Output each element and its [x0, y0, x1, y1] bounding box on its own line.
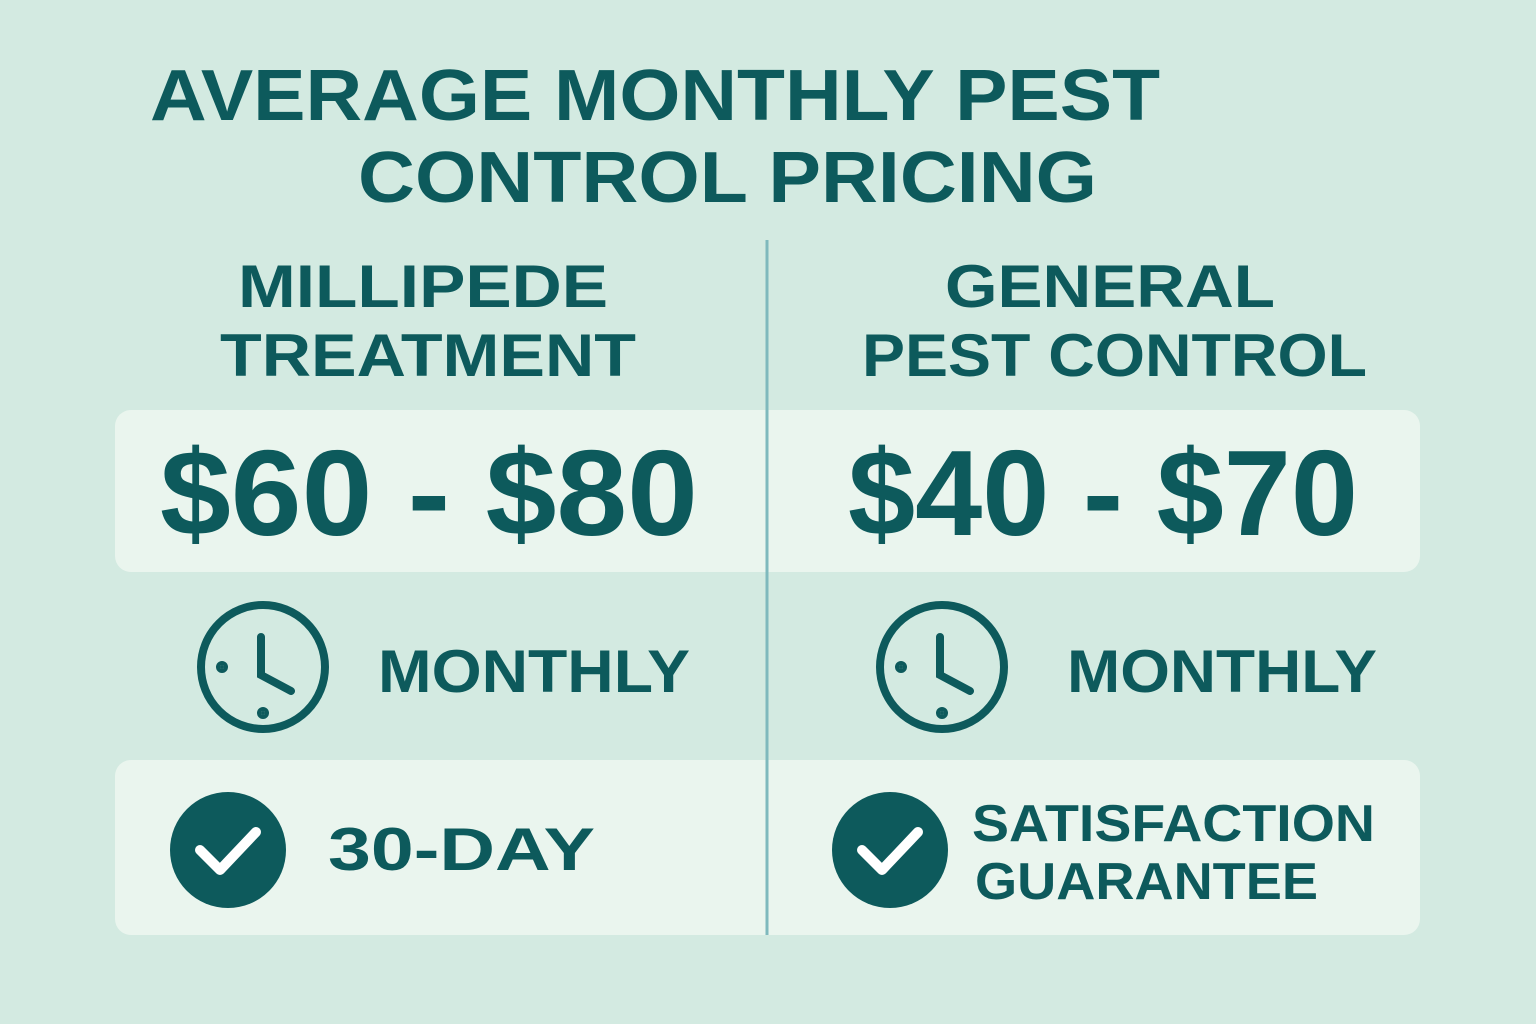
price: millipede: $60 - $80 [160, 425, 698, 561]
divider [766, 240, 768, 935]
frequency label right: MONTHLY [1067, 638, 1377, 705]
heading: general pest control: PEST CONTROL [862, 322, 1367, 389]
icon: clock right [880, 605, 1004, 729]
heading: millipede treatment: MILLIPEDE [238, 253, 608, 320]
title: AVERAGE MONTHLY PEST [150, 56, 1160, 136]
heading: millipede treatment: TREATMENT [220, 322, 636, 389]
icon: check left [170, 792, 286, 908]
guarantee label right: GUARANTEE [975, 853, 1318, 911]
guarantee label right: SATISFACTION [972, 795, 1375, 853]
title: CONTROL PRICING [358, 138, 1097, 218]
heading: general pest control [862, 253, 1367, 389]
guarantee label right [972, 795, 1375, 911]
guarantee box background [115, 760, 1420, 935]
heading: general pest control: GENERAL [945, 253, 1275, 320]
price: general: $40 - $70 [848, 425, 1358, 561]
icon: check right [832, 792, 948, 908]
heading: millipede treatment [220, 253, 636, 389]
guarantee label left: 30-DAY [328, 816, 595, 883]
title [150, 56, 1160, 218]
price box background [115, 410, 1420, 572]
frequency label left: MONTHLY [378, 638, 690, 705]
icon: clock left [201, 605, 325, 729]
